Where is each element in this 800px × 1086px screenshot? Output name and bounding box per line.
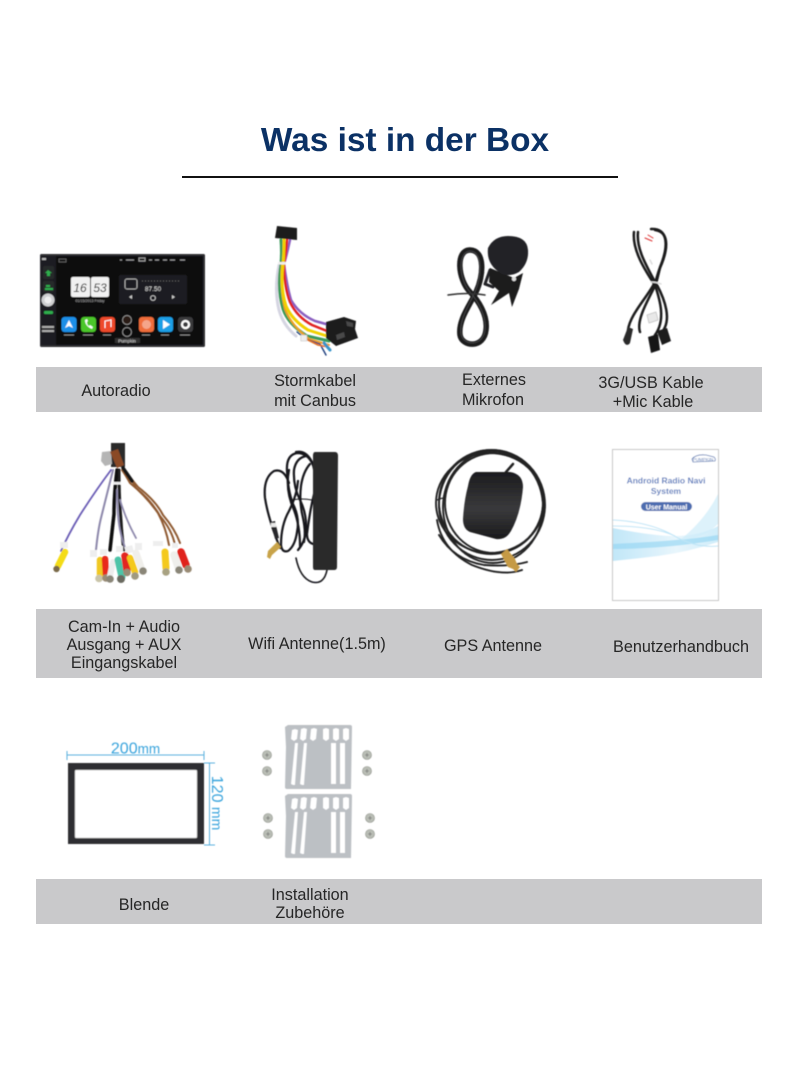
clock cards: 01/15/2013 Friday xyxy=(76,299,105,303)
icon: user manual booklet: Android Radio Navi xyxy=(627,476,705,486)
icon: Cam-In audio AUX RCA cable xyxy=(53,443,192,583)
icon: user manual booklet: PUMPKIN xyxy=(693,457,713,462)
manual waves xyxy=(613,494,718,561)
label: Cam-In + Audio Ausgang + AUX Eingangskabel: Cam-In + Audio xyxy=(68,618,180,636)
icon: installation brackets and screws xyxy=(262,725,374,858)
label: Autoradio: Autoradio xyxy=(81,382,151,400)
label: Installation Zubehöre: Zubehöre xyxy=(275,904,345,922)
title: Was ist in der Box xyxy=(261,122,550,159)
label band: row 2 xyxy=(36,609,762,678)
radio widget xyxy=(119,275,187,304)
label: Externes Mikrofon: Mikrofon xyxy=(462,391,524,409)
bracket: upper xyxy=(285,725,352,789)
label: Externes Mikrofon: Externes xyxy=(462,371,526,389)
icon: user manual booklet xyxy=(612,450,718,600)
label: 3G/USB Kable +Mic Kable: 3G/USB Kable xyxy=(598,374,704,392)
label: Blende: Blende xyxy=(119,896,169,914)
label: Stormkabel mit Canbus: mit Canbus xyxy=(274,392,356,410)
icon: 3G/USB and mic cable xyxy=(623,229,671,353)
icon: car radio xyxy=(40,254,205,347)
icon: GPS antenna xyxy=(436,450,545,573)
label: 3G/USB Kable +Mic Kable: +Mic Kable xyxy=(613,393,693,411)
clock cards: 16 xyxy=(73,281,87,295)
icon: wifi antenna xyxy=(265,452,338,582)
bracket: lower xyxy=(285,794,352,858)
label: Stormkabel mit Canbus: Stormkabel xyxy=(274,372,356,390)
label: Installation Zubehöre: Installation xyxy=(271,886,349,904)
dimension: 120 mm: 120 mm xyxy=(208,776,225,830)
label band: row 3 xyxy=(36,879,762,924)
icon: user manual booklet: User Manual xyxy=(646,504,687,512)
clock cards: 53 xyxy=(93,281,107,295)
title underline xyxy=(182,176,618,178)
clock cards xyxy=(71,277,109,303)
icon: power cable with canbus xyxy=(275,226,358,355)
label: Cam-In + Audio Ausgang + AUX Eingangskabel: Ausgang + AUX xyxy=(67,636,182,654)
radio widget: 87.50 xyxy=(145,286,162,293)
dimension: 200mm: 200mm xyxy=(111,740,160,758)
label: Benutzerhandbuch: Benutzerhandbuch xyxy=(613,638,749,656)
icon: car radio: Pumpkin xyxy=(118,338,136,344)
label: Wifi Antenne: Wifi Antenne(1.5m) xyxy=(248,635,386,653)
icon: mounting frame with dimensions xyxy=(67,740,225,845)
icon: external microphone xyxy=(448,236,528,344)
RCA plugs xyxy=(53,552,192,583)
label: Cam-In + Audio Ausgang + AUX Eingangskabel: Eingangskabel xyxy=(71,654,177,672)
label: GPS Antenne: GPS Antenne xyxy=(444,637,542,655)
label band: row 1 xyxy=(36,367,762,412)
app icons xyxy=(62,316,193,336)
icon: user manual booklet: System xyxy=(651,486,682,496)
screws xyxy=(262,750,374,838)
